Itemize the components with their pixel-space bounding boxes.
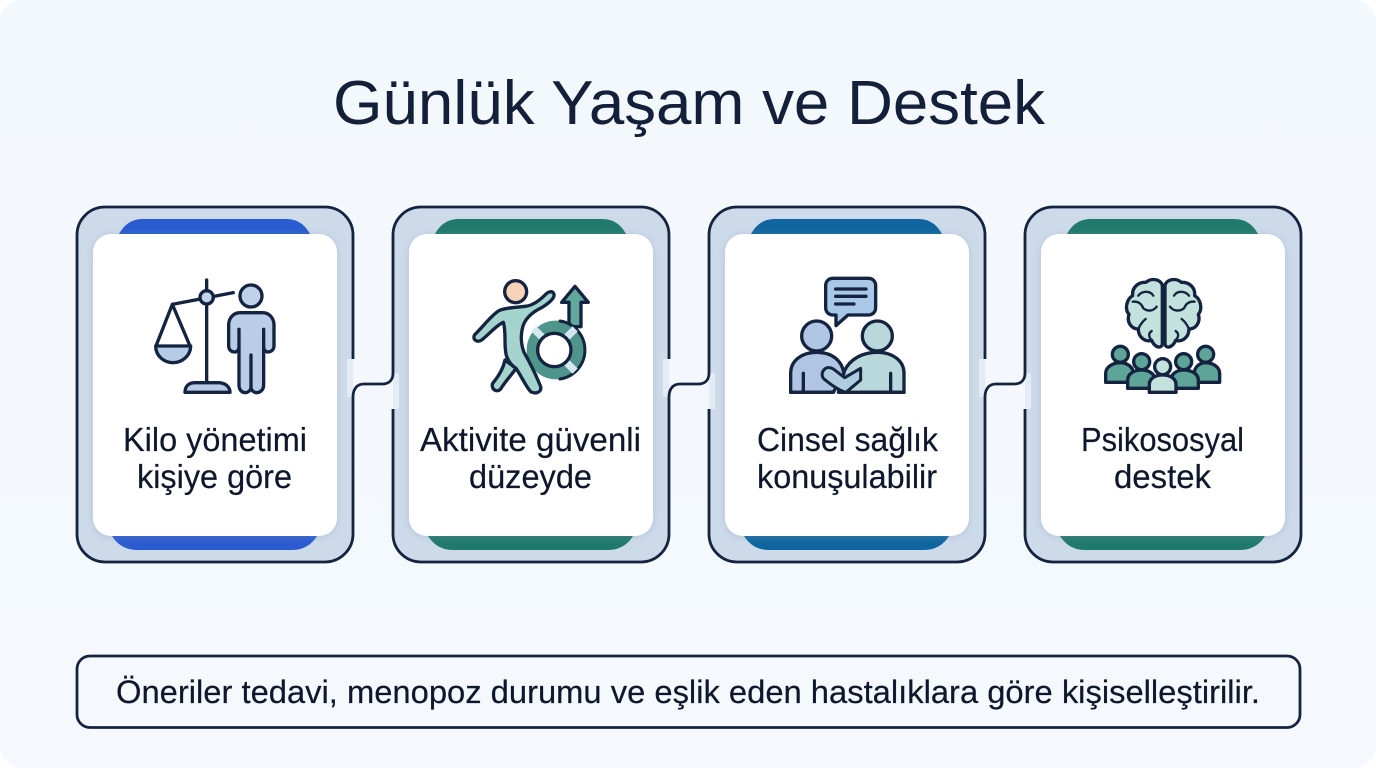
top tab	[1067, 219, 1258, 234]
panel: psikososyal destek	[1025, 207, 1301, 562]
label	[1081, 421, 1244, 495]
label	[420, 421, 641, 495]
panel: kilo yönetimi	[77, 207, 353, 562]
icon: brain and group	[1106, 280, 1220, 392]
white card	[409, 234, 653, 536]
top tab	[119, 219, 310, 234]
label: kişiye göre	[137, 458, 292, 495]
label: Aktivite güvenli	[420, 421, 641, 458]
arrow: connector 2	[669, 373, 709, 397]
frame	[77, 207, 353, 562]
label	[757, 421, 938, 495]
frame	[709, 207, 985, 562]
title: Günlük Yaşam ve Destek	[333, 69, 1046, 138]
arrow: connector 3	[985, 373, 1025, 397]
label: Cinsel sağlık	[757, 421, 938, 458]
icon: two people talking	[791, 278, 904, 392]
bottom tab	[428, 536, 633, 550]
frame	[1025, 207, 1301, 562]
label: düzeyde	[469, 458, 592, 495]
icon: scale and person	[156, 280, 274, 393]
label: Kilo yönetimi	[123, 421, 307, 458]
label: Psikososyal	[1081, 421, 1244, 458]
bottom tab	[744, 536, 949, 550]
panel: cinsel sağlık	[709, 207, 985, 562]
top tab	[435, 219, 626, 234]
bottom tab	[112, 536, 317, 550]
label: destek	[1114, 458, 1211, 495]
top tab	[751, 219, 942, 234]
callout: Öneriler tedavi, menopoz durumu ve eşlik eden hastalıklara göre kişiselleştirilir.	[116, 674, 1260, 710]
arrow: connector 1	[353, 373, 393, 397]
white card	[725, 234, 969, 536]
label	[123, 421, 307, 495]
label: konuşulabilir	[757, 458, 937, 495]
white card	[1041, 234, 1285, 536]
frame	[393, 207, 669, 562]
icon: active person with lifebuoy	[474, 281, 588, 393]
callout	[77, 656, 1300, 728]
bottom tab	[1060, 536, 1265, 550]
panel: aktivite	[393, 207, 669, 562]
white card	[93, 234, 337, 536]
